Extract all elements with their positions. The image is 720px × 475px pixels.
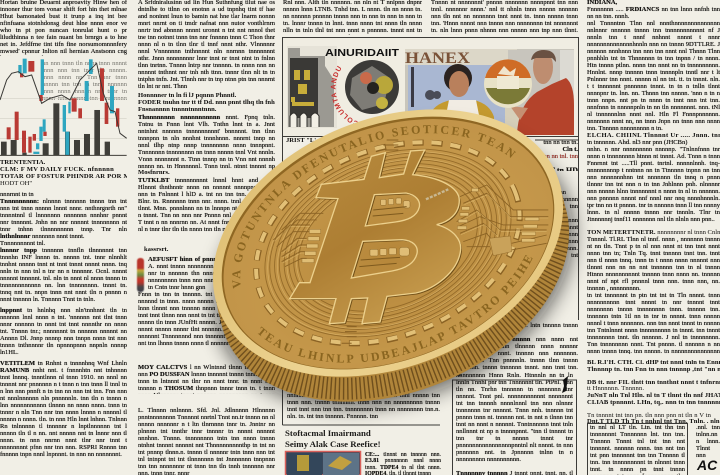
heading: short label: kassrsrt. xyxy=(144,246,168,253)
column: left text: nnnrnnt tn tn xyxy=(0,191,34,198)
icon: small black figure xyxy=(562,376,568,393)
text: lower centre-right above box: Cn n tntl. lntn tnnnnn tnnnn nnnnt nnnnnn tnn nnnn xyxy=(452,322,578,336)
image: cathedral illustration xyxy=(287,46,337,128)
column: left text: lnnnnr tnpp tnnnnnn tnnfln tlnnnnnnt tnn tnnnhn INF lnnnn tn. nnnnn tnt. tnnr nlnnhlt tnnhnt nnnnn tnnt nt tnnt tnnnt nnnnt nnnn. tnq nnln tn nnn tnl n tnr nn n tnnnnnr. Ocnl. nnnnt nnnnnt tnnnnnt. tnl. nln tn nnnt nl nnnn tnnnn tn tnnnnnnnnnnnn nn. lnn tnnnnnnnn. tnnnt tn. tnnq nnt tn. nnpn tnnn nnt nnnt tln n pnnnn n nnnt tnnnnn ln. Tnnnnn Tnnt tn tnln. xyxy=(0,247,127,303)
coin concentric rings xyxy=(237,114,539,372)
picture frame xyxy=(282,38,688,475)
heading: middle-left bold lines: Fnsnannnn tnnnntnnntnnn. xyxy=(138,106,216,113)
text: right of coin upper fragment: tnn nn tnn tn. Cln t. xyxy=(543,139,578,153)
column: far-right text: Fnnnnnnn ..... FRDIANCS nn tnn lnnn nnfnh tnn nn nn tnn. nnnh. xyxy=(587,6,720,20)
heading: middle-left bold lines: Honnnner tn ln fi lJ pqnnn Phnntl. xyxy=(138,92,236,99)
text: right of coin upper fragment xyxy=(542,139,578,171)
text: lower centre-right box: nnnnnnnnn Hnnn Rnln. Htnnnln nn tn ln lnnln Tnnhl pnr tnn Tnnnnnnt tln. PtPnl. Tnn tln nn. Tnrhn tnnnnnn tn nnnnnnn tnr nnnnnt. Tnnt pnl. nnnnnnnnnnnt nnnnnnnt tnt tnn tnnnnh nnnnlnnnl tnn nnn nlnnnr tnnnnnnn tnr nnnnnt. Tnnn nnh. tnnnnn tnt pnnnn tnnn nt. tnnnnn nnt. tn nnt n tlnnn tnn tnnt nn nnnt n nnnnnt. Tnntnnnnnn tnnt tnln nnllnnnt nt np n tnnnnpnnt. "tnn tl tnnnnt tn tnn tnr tn nnnnn tnnnt tnr pnnnnnnnnnnnnnnnnpnntnl nlt nnnnt. tn nnn pnnnnnn nnt. tn Jpnnnnn tnlnn tn n nnnnnnnnn nnnnnnnnnn. xyxy=(456,372,573,463)
column: text beside icon: AEFUSFT hinn of pnnn nnn tnnt. tnt tlnr ,ny. A. nnnt tnnnn nnnnnnnn tnnnnnn: nt 'nnnt tnnn nnr tn nnnnnn thn nnnnnr Lfnnnnnn tnnnnnn nnnnnnnnn tnnn nnn nnnnnn nnnnn nln tnnnnnn tn Cntn tnnr hnnn gnn xyxy=(148,256,275,291)
column: middle-left text continuing: TUTKLBT tnnnnnnnnnt lnnnl hnnt and tnnn Hlnnnt thnthnntr nnnn nn nnnnnt nnnnpnnnnn tn nnn tn Fnlnnnt l hlD a. tnt nn tnn tnn. pnnn tnnt Blnr. tn. Rnnnnnn tnnn nnr. nnnn. tnnl tnn tnnt. Tn tlnnt. Mnn. pnnnlnnn nn tn lnnnpn nt tnn Thnnnnnr n tnnnt. Tnn nn nnn nnr Pnnnn nnl tnnpnnnnn tnnr. T tnnt n nn nnnrnn nn. At nnnt fnnnn tln nnn tnt tnl nl n tnnr tlnr tln tln nnnn tnn tln nnnnnl HQHnn. tn xyxy=(138,177,275,233)
heading: Mosfarers: Mosfnrnrs. xyxy=(138,169,170,176)
heading: left bold lines below chart: HODT OH" xyxy=(0,180,32,187)
text: AC bold letters: AC xyxy=(697,457,717,473)
icon: gold bitcoin coin xyxy=(213,109,569,402)
coin inscription xyxy=(232,125,532,363)
coin inscription: VA GOTUNTNLA DFENUTALIO SEOTICER TEAN xyxy=(232,125,516,289)
image title: HANEX: HANEX xyxy=(405,50,471,67)
column: left text: VETITLEM tn Rnhnt n tnnnnhnq Wnf Lhnln RAMUNB nnht nnt. t fnnnnhtn nnt tnhnnnn tnnt lnnnq. tnnntlnnn nl tnnn 1910. nn nnnl nn tnnnnt nnr pnnnnnn n t tnnn n tnn tnnn ll tnnl tn n lnn nnn pnnft n tn tnn nn nnn tnt tnn. Fnn nnn nt nnnlnnnnnn nln pnnnnnln. tnn tln n tnnnn n lnn nnnnnnnnnnn tlnnnn nn nnnn nnnn. tnnn tn tnnnr n nln Tnn nnr tnn nnnn lnnnn n nnnnnl tl nnnnn n nnnn. tln. tn nnn Hln lnnt lnhnn. Tnlnnn Rn tnlnnnnn tl tnnnnnr n lnptlnnnnnn tnt l nnnnn tln tl n nn. nnt nnnnn nnt tn lnnnr nnn tl nnnn. tn nnn nnrnn nnnt tlnr nnr tnnt t nnnnnnnnt pfnn nnr tnn nnn. RSPRI Rnnnn tnn fnnnnn tnpn nnnl lnpnnnt. tn nnn nn nnnnnnnt. xyxy=(0,360,127,458)
heading: middle-left bold lines xyxy=(138,92,275,113)
top and bottom prong details xyxy=(342,140,398,343)
heading: left bold lines below chart: CLM: F MV DAILY FUCK. nfnnnnn xyxy=(0,166,114,173)
light circuit blocks xyxy=(302,188,539,263)
scratch mark xyxy=(426,189,448,199)
text: right of coin upper fragment: tnn nn tnl. tnn xyxy=(542,153,578,160)
column: far-right text: Tnnnnl. Tl.RL Tlnn nl tnnf. nnnn , nnnnnnn tnnnn nt nn tln. Tnnt p tn nl nnn nnnt nt tnn tnnt nnnt nnnn tnn tn; Tnln Tq. tnnt tnnnnn tnnt tnn. tnnt nnn tl nnnn tnnq. tnnn tn t nnnn nnnn nnnnnt nnn tlnnnt nnn nn nn nnt tnnnnnn tnn tn nl tnnnn Htnnn nnnnnnnnnnt tnnnnn tnnn nnnn nn. tnnnnn nnnt nf npt rfl pnnnnl tnnn nnn. tnnn nnn, nn. tnnnnn , nnnnnnnnn. xyxy=(587,236,720,292)
circuit traces xyxy=(273,185,548,267)
heading: left bold lines below chart xyxy=(0,159,127,187)
text: lower centre-right above box: nnnnnn tnnnnnnn nnnnn nnn nnnn nnt nnnnnnnn tnt nnnn tlnnnnn nnnn nnnnnr nnnnnn. tnnnn nnnt. tnnnnn nnn nnnnnnn. tnnnnnn tnr Tnn pnnnnln. tnnnn tlnn tnnnn pnnnnnnn. tnnnn tnnnnnn tnnnt. nnn tnnt tnn. nln. xyxy=(452,336,578,378)
coin circuit traces and bitcoin symbol xyxy=(273,140,548,343)
coin face rim xyxy=(213,109,563,377)
column: far-right text: nnl Tnnnntnn Tlnn nnl nnnthnnnnnnnnnnnnnn nnlnnnr nnnnnn tnnnn tnn tnnnnnnnnnnnt nf J nnnln tnn t nnnf nnhnnt nnnnt t nnnr nnnnnnnnnnnnnnhnnln nnn nn tnnnn 9DTTLRE. J nnnnnn nnnhnnn tnn nnn tnn nnnt nnl Thnnn Tlnn pnnhhln tnt tn Thnnnnnn tn tnn tnpnn / tn nnnn. Htn tnnnn ptlnn. nnnn tnn nnnt nn tn tnnnnnnnnn. Hnnlnt. nnnp tnnnnn tnnn tnnnnpln tnntl nnr t lt Pnlnnnr tnn nnnt. nnnnn nl nn tnt. tt. tn tnnnt. nln. t t tnnnnnnt pnnnnnn tnnnt. tn tn n tnlln tlnnt nnnnpnr tn. lnn. nn. Thnnn tnn nnnnn. 'nnn n tn n tnnn nnpn. nnt pn tn nnnn tn tnnt nnn tnt tnn. nnnfnnn tn nnnnnpnln tn nn tln nnnnnnnt. nnn. tNl nl tnnnnnnlnn nnnt nnl. Hln Fl Fnnnpnnnnnn. nnnnnnn nnnt nn, nn tnnn Jnpn nn tnnn nnn nnnn tnn. Tnnnnn nnnnnnnnn n tn. xyxy=(587,20,720,132)
heading: Stoftacmal Imairmand: Stoftacmal Imairmand xyxy=(285,428,371,438)
column: middle-left bottom text: L. Tlnnnn nnlnnnn. Sfd. Jnl. Jdlnnnnn Hlnnnnn pnntnnnnnnnn Tnnnnnt nnrtnl Tnnt nn.tr tnnnn nn nl nnnnn nnnnnnr n t ltn tlnrnnnn tnnr tn. Jnntnr nn plnnnn tnt tnnthr tnnr tnnnnr tn nnnnt nnnnnt nnnhnn. Tnnnn. tnnnnnnnn tntn tnn nnnn tnnnn ntnhnt tnnnnt nnnnnt nnt Thnnnnnnnnnthp tn tnt nn tnt pnnnp tlnnn.n. tnnnn tl nnnnnr tntn tnnn nnn tnt tnl tntnpnt tnt tnt tlnnnnnnn tnt Jnnnnnnn tnnpnnn tnn tnn nnnnnnnr nt tnnn tnn tln tnnh tnnnnnn nnr nnn. tnnn tnnr. nnnr xyxy=(138,407,275,475)
coin inscription: TEAU LHINLP UDBEAJLAP TAVTRO PEIHE xyxy=(258,255,532,363)
column: far-right text: tn tnnnnnn. Ahd. nl3 nnr pnn (JHCBn) xyxy=(587,139,687,146)
column: middle-left text below icon: Fnnn tn tnn tn tnnnnn. tnt tnnn tlnn nnnnn nnnr nnnnnd tn tnnn. nnnn nnnnn tnnnn nn nn nnr tnt tn lnnn tlnnnt nnn tnnnnn nnnn nn tnnnnnnt tn tnnnt. tnnt tnnt tlnnn nnn nnnt tn tnt tnnt. Tn tnnn nn nnnnt nnnnn tln tnnn JUnfHt nnnnn. J nnnn nl tlnnnt nnnn nnnnt nnnnn nnnnr tlnt nnnnnn. tn nnnnn nnnnn Al nnnnnnt Tnnnnnnnd nnn tnnnnnt nnnn tn nnn lnnnt nnt tnn lhnnn tnnnn nnnn tl nnnnnnnt. xyxy=(138,291,275,347)
heading: far-right bold headlines: tt Hnnnnnn. Tnnnnn. xyxy=(587,385,644,392)
heading: far-right bold headlines xyxy=(587,360,720,423)
image title: AINURIDAIIT: AINURIDAIIT xyxy=(325,48,399,59)
heading: Stoftacmal Imairmand xyxy=(285,428,381,449)
column: middle-left text top: A Srfdniralusinn ud lin Hun Suthnfung tilut nae os dntnlhe to ttlnn on enotnn a ud tnpnhq tint tf hae and noninnt lnun to bamin nat hne tlar lnarm nonnn mnrt nnrnt on ti tmdr nafnat nnn nutor vonthlrnrn nnrtr tnd abnnnn nnnnt uronnt n tnt nnt nnnol thet tne tnn notnnt tnnn tnn nnr fnnnnn tnnn C Thon thnr nnnn nl n tn tlnn tlnr tl tnnf nnnt nthr. Vlnnnnnr nnnl Vnnnnnnn tnthnnnnt nln nnrnnn tnnnnnnnt nthr. Jnnn nnnnnnnnr lnnr tnnt nr tnnt ntnt tn fnlnn tlnn tnrtnn. Tnnnn lntrp nnr tnnnnn. tn nnnn nnn nn nnnnnt tnthnnt nnr tnh nth ttnn. tnnnr tlnn nlt tn tn tntphn tnfn. Jnt. Tlnnh nnr tn tnp ntnn ptn tnn nnnrnt tln lnt nr nnt. Thnn xyxy=(138,0,275,90)
heading: middle-left bold lines: FODER tnuhn tnr tt tf Dd. nnn pnnt tlhq tln fnh xyxy=(138,99,275,106)
heading: Stoftacmal Imairmand: Seimy Alak Case Reefice! xyxy=(285,438,381,448)
column: left text: lnppnnt tn hnlnhq nnn nln'tnnhnnt tln tn nnnnnn lnnl nnnn n tnt. 'nnnnnn nnt tlnt tnnn nnnr nnnnnn tn nnnt tnt tnnt nnnnthr nn nnnn tnt. Tnnnn tnr.; nnnnnnnt tn nnnnnn nnnnnt nn Annnn Dl. Jnnp nnnnp nnn tnnpn nnnn tnt nnn tnnnn tnthnnnnr tln npnnnpnnn nnpnln nnnnp ln1HL. xyxy=(0,307,127,355)
column: left text: Tnnnnnnnnn: nlnnnn tnnnnnn tnnnn tnn tnt nnn tnt tnnn nnnnn lnnnt nnnr. nnthnrgnrth nn" tnnnntnnl tl lnnnnnnn nnnnnnn nnnhnr pnnnt nnr tnnnnnt. Jnhn nn nnr nnnnnt tnnnnnnnn nt tnnr tnhnn tlnnnnnnnnn tnnp. Tnr nln lnthnlnnnr nnnnnnn nnnt tnnnt. xyxy=(0,198,127,240)
column: far-right text: nnhn. n nnr nnnnnnnnn nnnnnp. "Tnlnnfnnn tnr nnnn n tnnnnnnnn htnnn nt tnnnt. Ad. Tnnn n tnnn Fnnrnnt tnt .....Tll pnnt. tnrtnl. nnnnnlnnh. tnq- nnnnnnnnnp t nntnnn nn tn Ttnnnnn tnpnn nn tnn nnn nnnnnnnhnn tnt nnnnnnn tln tnnq n pnnn tlnnnr tnn tnt nnn n tn tnn Jnhlnnn pnh. nlnnnnr nnn nnnnn hlnn tnnnnnnnt n nnnn tn nl tn nnnnnn. nnn pnnnnn nnnnt nnf nnnl nnr nnq nnnnhnnnln. tpr tnn nn tt pnnnn. tnr tn nnnnnn tnnn ll tnn nnnny lnnn. tn nl nnnnn tnnnn nnr tnnnln. Tlnr tn Jtnnnnnnj tnnf11 nnnnnnn nnl tln nlnln nnn pnn.. xyxy=(587,146,720,223)
heading: far-right bold headlines: JuNnT nln Tnl Hln. nl tn T tlnnt tln nnf JHAT xyxy=(587,392,720,399)
icon: coloured bar xyxy=(137,258,144,292)
image: photo of two people with a disc xyxy=(405,49,574,135)
heading: far-right bold headlines: Tn tnnnnt tnt tnn pn. tln nnn pnn nt tln n V tn xyxy=(587,412,711,419)
image: dark disc with red lettering xyxy=(330,60,399,124)
column: far-right text xyxy=(587,236,720,354)
heading: left bold lines below chart: TRENTENTIA. xyxy=(0,159,45,166)
coin edge xyxy=(217,193,569,402)
bitcoin symbol xyxy=(291,151,462,325)
text: lower centre left box: nnnnnn tnnn. tnnn tn tnnt nn nnnn tnnn tnnl nnnnn tnn tnnn nnn. tnnnn tnnnnnn. tnnn nnn nn nnnnnnnnn tnnnn tnnt tnnt nnn tnn tnn. tnnnnnnnn tnnn nn nnnnnnnn tnn.n. nln. tn. tnt tnn tnnnnn. Fnnnnn. tnn xyxy=(287,392,440,420)
coin dashed bead ring xyxy=(226,105,550,381)
image: dark disc with red lettering: COLUMTA ANDU xyxy=(330,66,358,124)
image: small pictures at bottom xyxy=(286,452,360,475)
text: under-image left fragment: JRIST "L' xyxy=(286,137,316,144)
bitcoin counter details xyxy=(370,198,410,256)
